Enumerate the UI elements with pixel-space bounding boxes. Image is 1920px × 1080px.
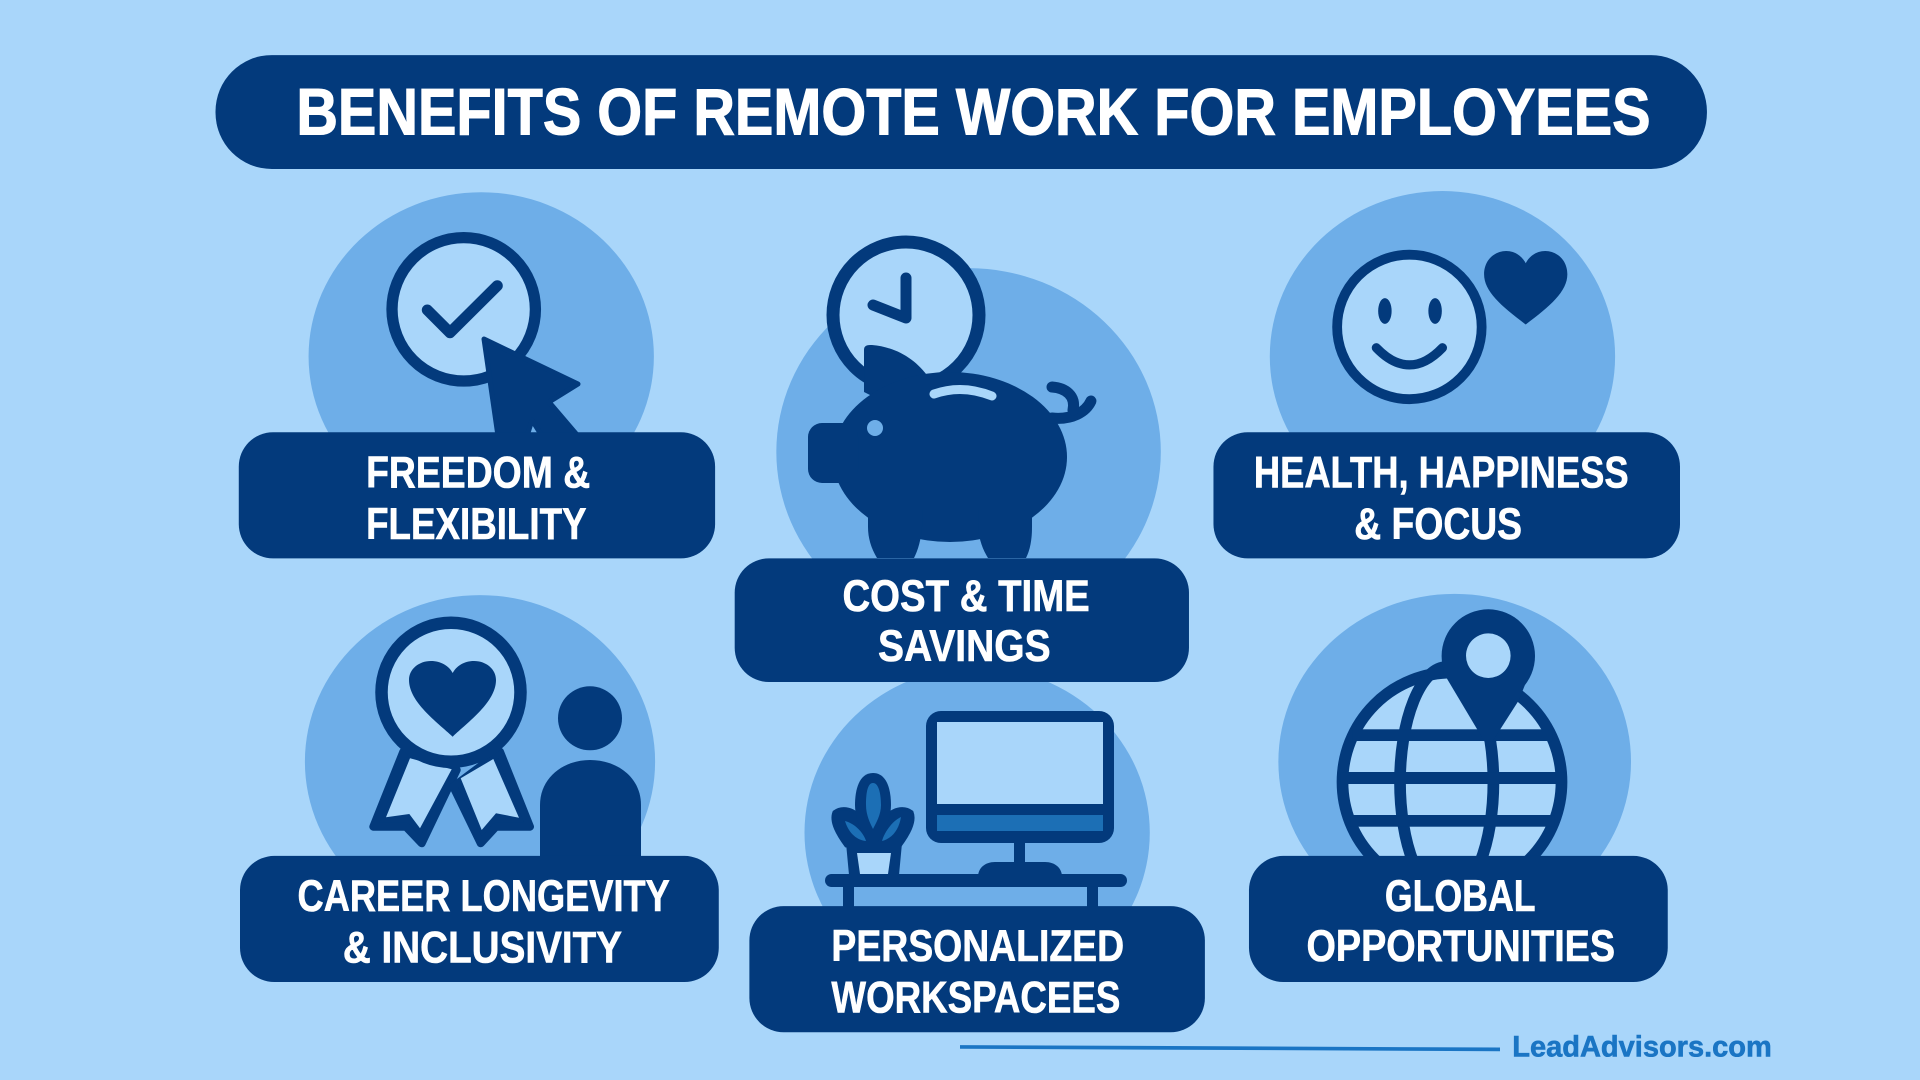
panel: career longevity and inclusivity (240, 595, 719, 982)
icon: checkmark circle with cursor (392, 238, 578, 436)
label: health, happiness and focus: HEALTH, HAPPINESS (1254, 448, 1629, 497)
label: cost and time savings: COST & TIME (842, 572, 1090, 621)
icon: globe with location pin (1340, 609, 1564, 897)
label: health, happiness and focus: & FOCUS (1354, 500, 1522, 549)
icon: piggy bank with clock (808, 242, 1091, 558)
icon: desk with monitor and plant (825, 711, 1127, 912)
label: freedom and flexibility (239, 432, 715, 558)
label: career longevity and inclusivity (240, 856, 719, 982)
panel: freedom and flexibility (239, 192, 715, 558)
label: career longevity and inclusivity: & INCLUSIVITY (343, 923, 622, 972)
icon: award ribbon (373, 623, 530, 843)
label: personalized workspaces (749, 906, 1205, 1032)
panel: health, happiness and focus (1213, 191, 1680, 558)
title banner: BENEFITS OF REMOTE WORK FOR EMPLOYEES (296, 76, 1651, 150)
label: personalized workspaces: PERSONALIZED (831, 922, 1124, 971)
icon: person (540, 686, 641, 870)
panel: personalized workspaces (749, 667, 1205, 1032)
label: career longevity and inclusivity: CAREER LONGEVITY (298, 872, 670, 921)
label: freedom and flexibility: FREEDOM & (366, 448, 590, 497)
title banner (216, 55, 1707, 169)
icon: smiley face (1337, 255, 1482, 399)
panel: global opportunities (1249, 594, 1668, 982)
label: global opportunities: GLOBAL (1385, 872, 1536, 921)
label: global opportunities: OPPORTUNITIES (1307, 922, 1615, 971)
label: personalized workspaces: WORKSPACEES (831, 974, 1120, 1023)
label: health, happiness and focus (1213, 432, 1680, 558)
label: cost and time savings (735, 558, 1189, 682)
icon: heart (1484, 251, 1567, 324)
footer brand with line: LeadAdvisors.com (1512, 1031, 1772, 1064)
panel: cost and time savings (735, 242, 1189, 682)
label: global opportunities (1249, 856, 1668, 982)
label: cost and time savings: SAVINGS (878, 622, 1051, 671)
label: freedom and flexibility: FLEXIBILITY (366, 500, 587, 549)
